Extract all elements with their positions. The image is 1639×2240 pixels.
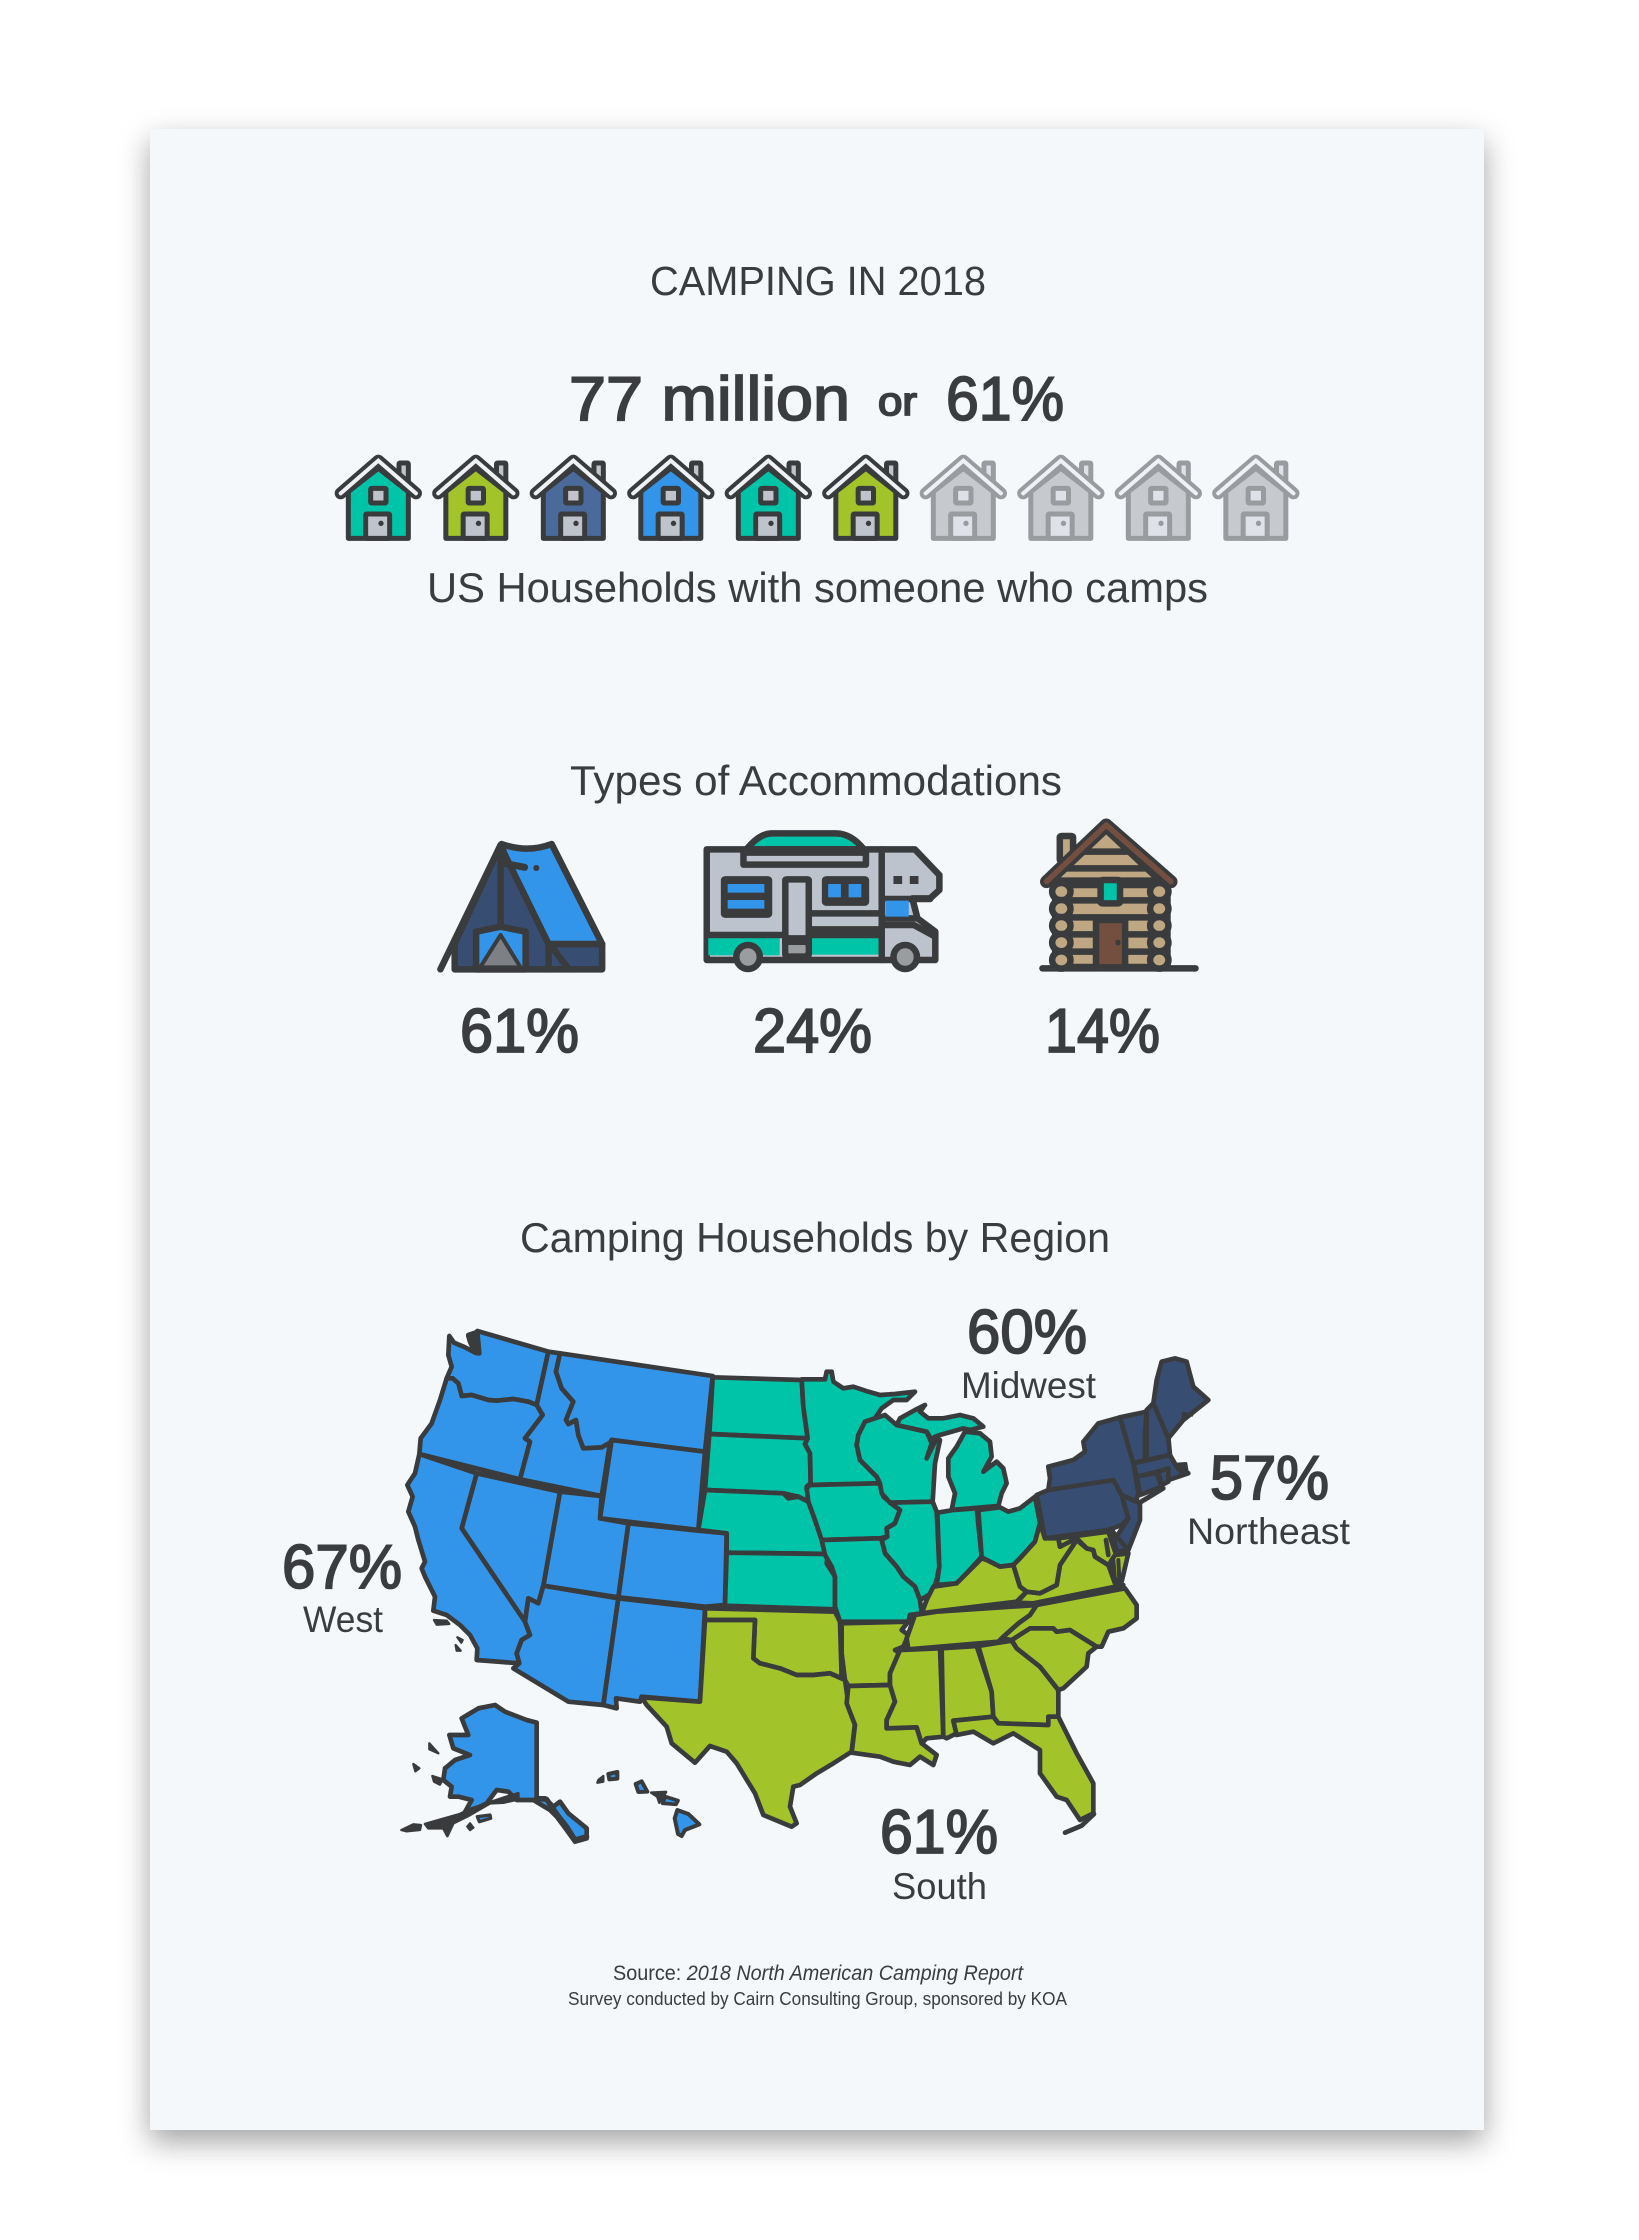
callout: Northeast 57% xyxy=(1187,1444,1351,1552)
title: CAMPING IN 2018 xyxy=(650,258,986,304)
headline stat: 77 million or 61%: 77 million xyxy=(569,365,850,434)
icon: house grey xyxy=(1218,461,1293,538)
source note xyxy=(568,1962,1067,2009)
map: Hawaii xyxy=(597,1772,699,1836)
icon: house teal xyxy=(341,461,416,538)
map region: Northeast xyxy=(1037,1358,1208,1552)
heading: camping households by region: Camping Households by Region xyxy=(520,1214,1110,1261)
callout: South 61% xyxy=(880,1798,998,1907)
callout: West 67% xyxy=(282,1533,402,1640)
icon: log cabin xyxy=(1042,825,1196,969)
map: Alaska xyxy=(401,1705,587,1842)
source note: Source: 2018 North American Camping Report xyxy=(613,1962,1024,1985)
headline stat: 77 million or 61%: 61% xyxy=(946,365,1064,434)
icon: house blue xyxy=(633,461,708,538)
map: United States by region xyxy=(401,1331,1208,1842)
icon: house grey xyxy=(1023,461,1098,538)
panel: card background xyxy=(150,129,1484,2130)
callout: South 61%: South xyxy=(892,1866,987,1907)
icon row: ten houses, six coloured xyxy=(341,461,1293,538)
callout: West 67%: 67% xyxy=(282,1533,402,1602)
icon: house teal xyxy=(731,461,806,538)
callout: Midwest 60% xyxy=(961,1298,1097,1406)
stat: cabin 14%: 14% xyxy=(1045,997,1160,1066)
caption: households: US Households with someone who camps xyxy=(427,564,1208,611)
map region: West xyxy=(407,1331,727,1708)
map region: Midwest xyxy=(698,1372,1040,1622)
callout: Midwest 60%: Midwest xyxy=(961,1365,1097,1406)
callout: West 67%: West xyxy=(303,1599,384,1640)
stat: tent 61%: 61% xyxy=(460,997,579,1066)
stat: RV 24%: 24% xyxy=(753,997,872,1066)
icon: house green xyxy=(828,461,903,538)
headline stat: 77 million or 61% xyxy=(569,365,1064,434)
heading: types of accommodations: Types of Accommodations xyxy=(570,757,1062,804)
map region: South xyxy=(642,1523,1137,1833)
headline stat: 77 million or 61%: or xyxy=(878,380,917,424)
icon: house grey xyxy=(1121,461,1196,538)
callout: Midwest 60%: 60% xyxy=(967,1298,1087,1367)
icon: house green xyxy=(438,461,513,538)
icon: tent xyxy=(440,844,602,969)
icon: house slate xyxy=(536,461,611,538)
callout: South 61%: 61% xyxy=(880,1798,998,1867)
callout: Northeast 57%: Northeast xyxy=(1187,1511,1351,1552)
source note: Survey conducted by Cairn Consulting Group, sponsored by KOA xyxy=(568,1989,1067,2009)
icon: house grey xyxy=(926,461,1001,538)
icon: motorhome RV xyxy=(707,833,939,969)
callout: Northeast 57%: 57% xyxy=(1210,1444,1329,1513)
